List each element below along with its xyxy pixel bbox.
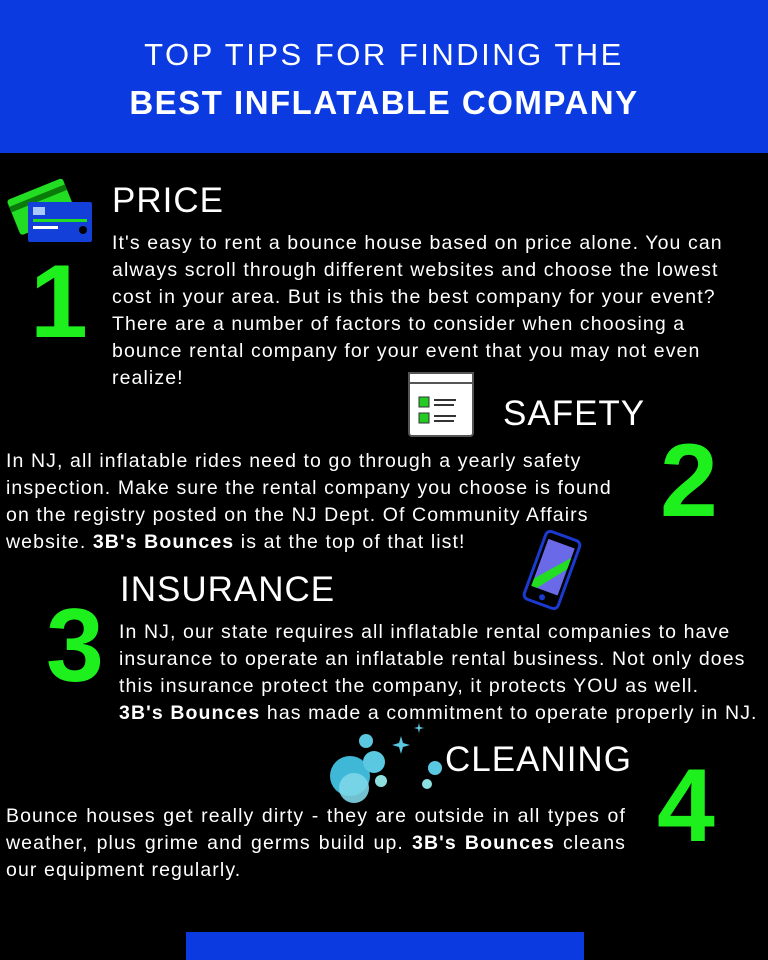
text: price: There are a number of factors to consider when choosing a	[112, 313, 685, 335]
icon: phone	[522, 530, 582, 610]
text: price: It's easy to rent a bounce house based on price alone. You can	[112, 232, 723, 254]
footer bar	[186, 932, 584, 960]
number 3: 3	[46, 588, 104, 704]
icon: credit cards	[8, 178, 92, 242]
text: insurance: In NJ, our state requires all inflatable rental companies to have	[119, 621, 730, 643]
header banner	[0, 0, 768, 153]
number 1: 1	[30, 244, 88, 360]
title: TOP TIPS FOR FINDING THE	[144, 37, 624, 72]
number 2: 2	[660, 423, 718, 539]
text: insurance: insurance to operate an inflatable rental business. Not only does	[119, 648, 746, 670]
text: safety: inspection. Make sure the rental company you choose is found	[6, 477, 612, 499]
icon: checklist calendar	[408, 372, 474, 437]
text: insurance: 3B's Bounces has made a commitment to operate properly in NJ.	[119, 702, 758, 724]
text: insurance: this insurance protect the company, it protects YOU as well.	[119, 675, 699, 697]
text: safety: on the registry posted on the NJ Dept. Of Community Affairs	[6, 504, 589, 526]
text: price	[112, 232, 723, 389]
title: BEST INFLATABLE COMPANY	[129, 84, 639, 121]
heading: price: PRICE	[112, 181, 224, 220]
title	[129, 37, 639, 121]
text: price: always scroll through different websites and choose the lowest	[112, 259, 719, 281]
text: price: realize!	[112, 367, 184, 389]
heading: cleaning: CLEANING	[445, 740, 632, 779]
text: safety: website. 3B's Bounces is at the top of that list!	[6, 531, 466, 553]
heading: insurance: INSURANCE	[120, 570, 335, 609]
heading: safety: SAFETY	[503, 394, 645, 433]
text: insurance	[119, 621, 758, 724]
text: price: cost in your area. But is this the best company for your event?	[112, 286, 716, 308]
icon: bubbles	[330, 723, 442, 803]
text: price: bounce rental company for your event that you may not even	[112, 340, 700, 362]
text: cleaning: Bounce houses get really dirty - they are outside in all types of weather, plus grime and germs build up. 3B's Bounces cleans our equipment regularly.	[6, 805, 626, 881]
number 4: 4	[657, 748, 715, 864]
text: safety: In NJ, all inflatable rides need to go through a yearly safety	[6, 450, 582, 472]
text: safety	[6, 450, 612, 553]
